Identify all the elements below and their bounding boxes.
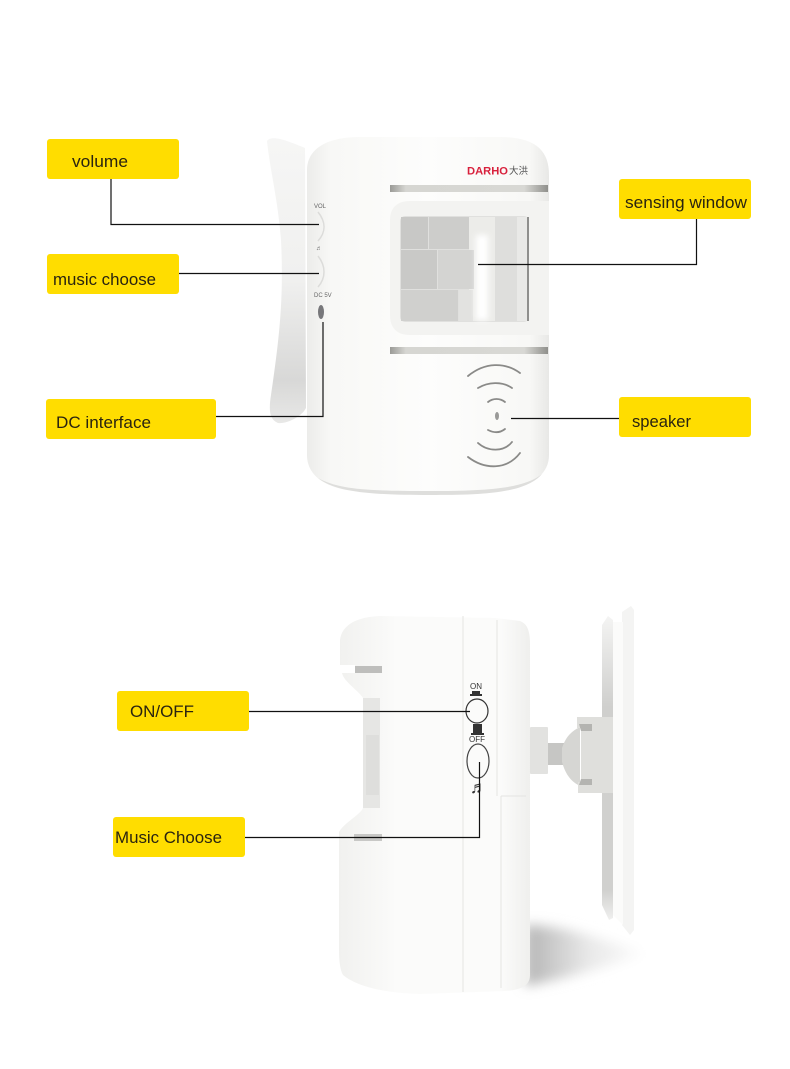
- side body: [339, 616, 530, 994]
- swivel ball: [562, 727, 580, 786]
- side device photo: [339, 606, 650, 994]
- label: music choose: [47, 254, 179, 294]
- sensing lens: [400, 216, 529, 322]
- label: DC interface: DC interface: [56, 413, 151, 432]
- on button: [466, 699, 488, 723]
- label: speaker: [619, 397, 751, 437]
- on symbol: [470, 691, 482, 696]
- upper slot: [390, 185, 548, 192]
- bracket notches: [579, 724, 592, 785]
- label: speaker: speaker: [632, 412, 691, 431]
- seam lines: [463, 616, 526, 992]
- speaker grille: [468, 365, 520, 466]
- label: sensing window: sensing window: [625, 193, 748, 212]
- music symbol: ♬: [316, 246, 322, 252]
- front device photo: [267, 137, 549, 495]
- lower slot: [390, 347, 548, 354]
- volume label: VOL: [314, 204, 327, 210]
- swivel block: [530, 727, 548, 774]
- brand chinese name: 大洪: [509, 165, 528, 177]
- floor shadow: [525, 925, 650, 986]
- device body: [307, 137, 549, 492]
- label: DC interface: [46, 399, 216, 439]
- brand logo: DARHO: [467, 166, 508, 178]
- dc socket: [318, 305, 324, 319]
- base shadow: [318, 474, 542, 495]
- swivel shaft: [547, 743, 564, 765]
- volume button: [318, 212, 324, 241]
- label: volume: volume: [72, 152, 128, 171]
- belt clip: [267, 138, 306, 423]
- window recess: [363, 698, 380, 808]
- music button: [467, 744, 489, 778]
- music button: [318, 256, 324, 287]
- off symbol: [471, 724, 484, 735]
- top slot: [355, 666, 382, 673]
- speaker hole: [495, 412, 499, 420]
- connector lines: [111, 179, 696, 838]
- label: Music Choose: [113, 817, 245, 857]
- label: ON/OFF: ON/OFF: [130, 702, 194, 721]
- mount plate inner: [602, 616, 613, 920]
- on label: ON: [470, 682, 482, 691]
- swivel bracket: [577, 717, 613, 793]
- label: ON/OFF: [117, 691, 249, 731]
- label: volume: [47, 139, 179, 179]
- off label: OFF: [469, 735, 485, 744]
- label: sensing window: [619, 179, 751, 219]
- label: music choose: music choose: [53, 270, 156, 289]
- sensing window frame: [390, 201, 549, 335]
- mount plate middle: [613, 622, 623, 925]
- label: Music Choose: Music Choose: [115, 828, 222, 847]
- bottom slot: [354, 834, 382, 841]
- music note icon: ♬: [470, 778, 487, 797]
- mount plate outer: [622, 606, 634, 935]
- dc label: DC 5V: [314, 293, 332, 299]
